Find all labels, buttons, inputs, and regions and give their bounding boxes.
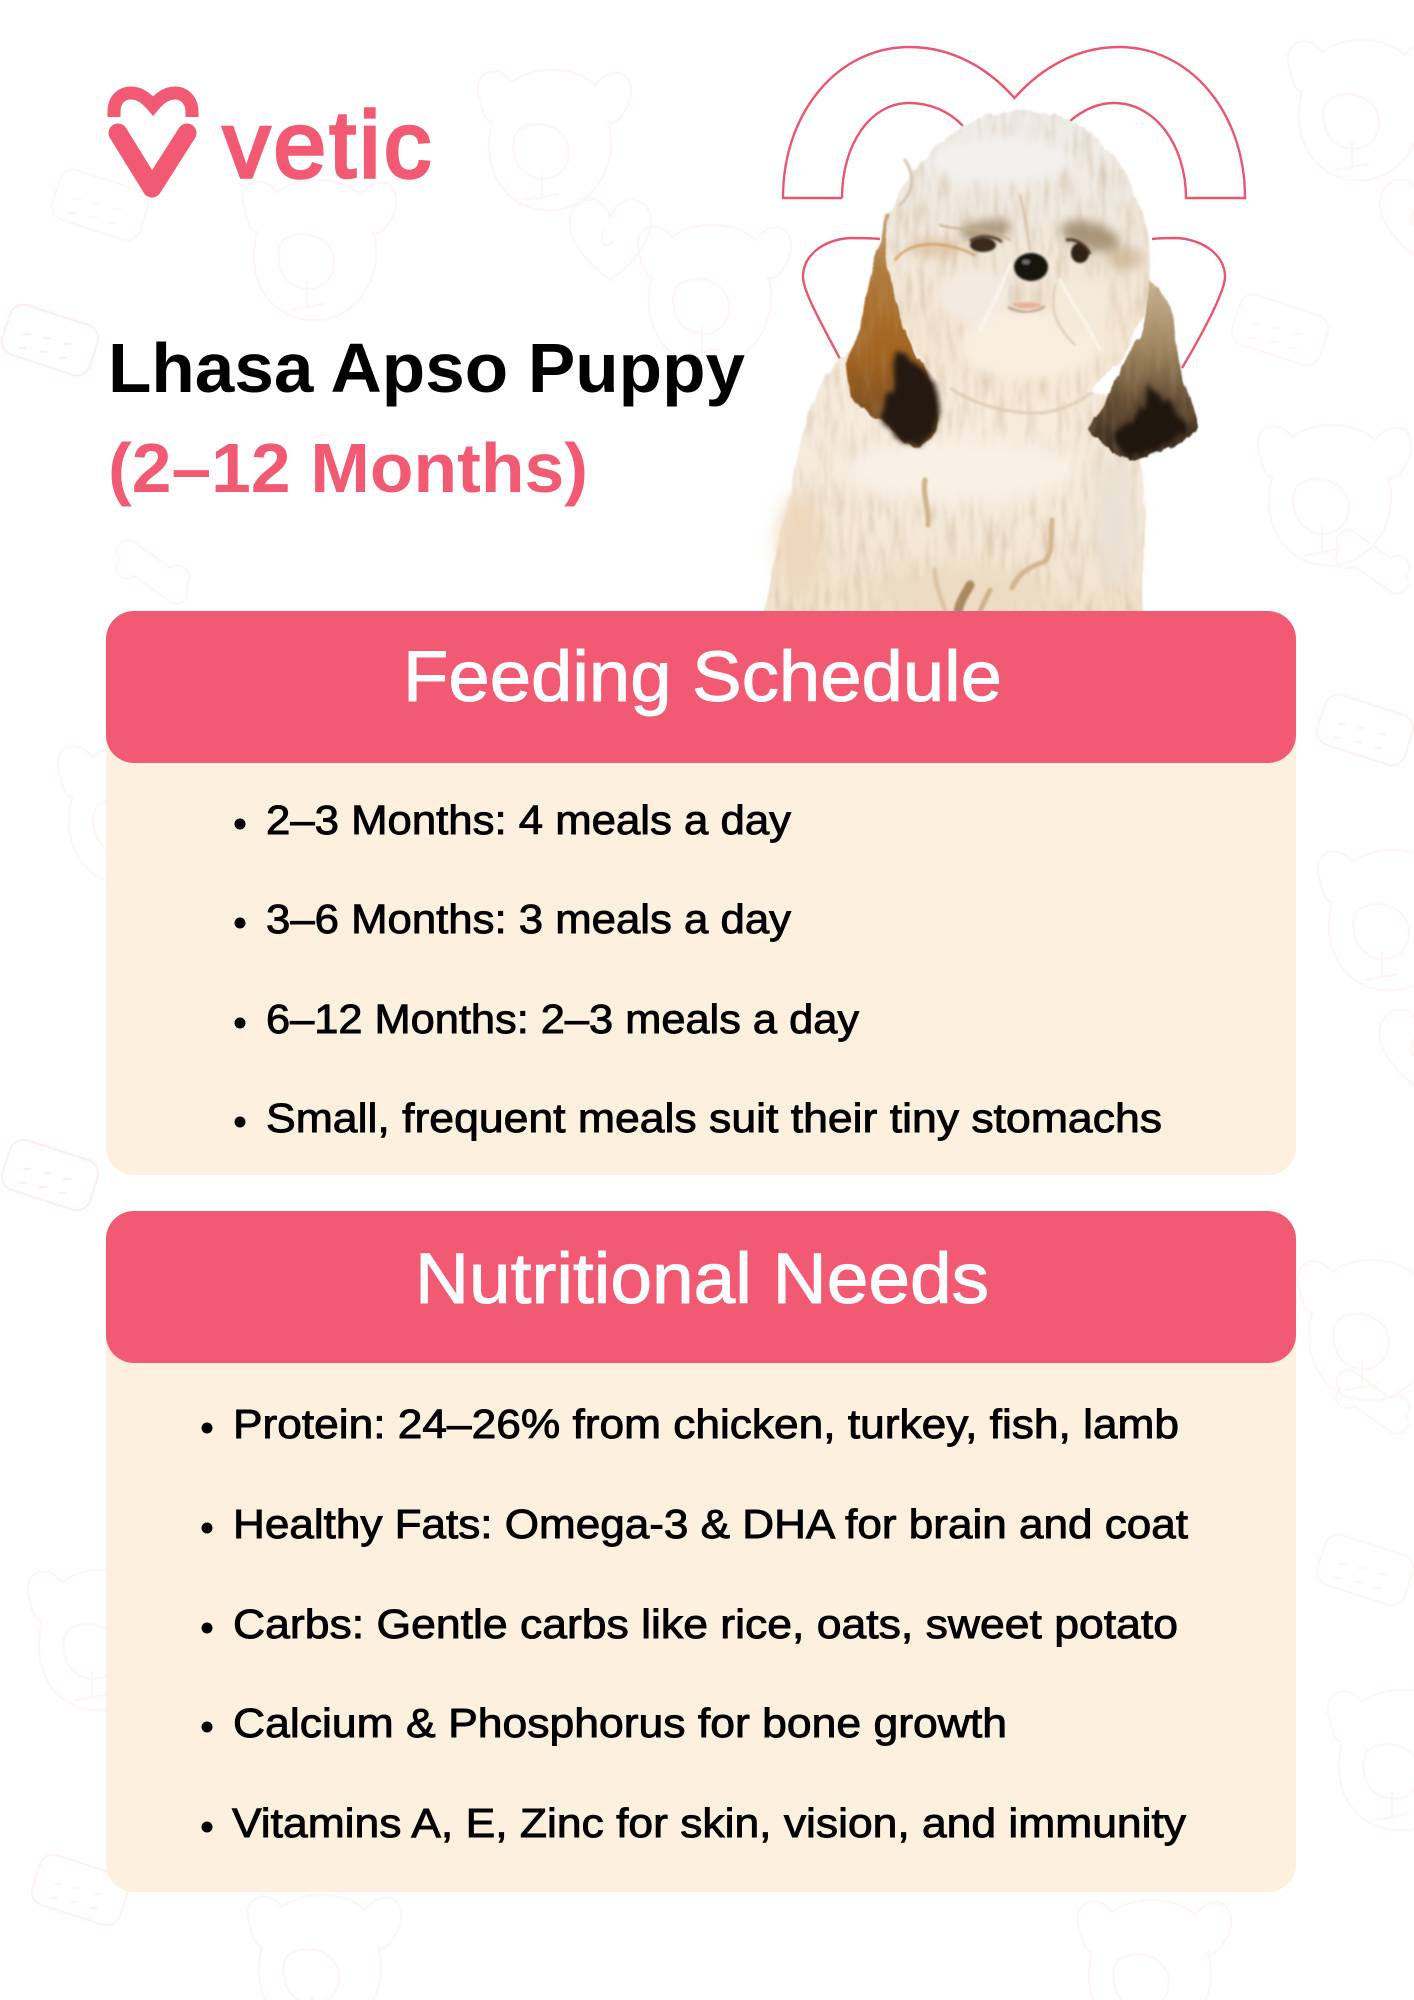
left eye [970, 237, 1002, 252]
panel header bar [106, 1211, 1296, 1363]
list item: Vitamins A, E, Zinc for skin, vision, and immunity [232, 1800, 1187, 1846]
list item: Healthy Fats: Omega-3 & DHA for brain and coat [233, 1501, 1189, 1547]
list item: Calcium & Phosphorus for bone growth [233, 1700, 1007, 1746]
body shading [778, 436, 1135, 616]
title line: breed name: Lhasa Apso Puppy [108, 329, 745, 407]
dog body [762, 350, 1144, 620]
title line: age range: (2–12 Months) [108, 429, 588, 507]
icon: heart and V logo mark [114, 93, 192, 188]
list item: 2–3 Months: 4 meals a day [266, 797, 792, 843]
right ear [1089, 275, 1197, 460]
list item: 3–6 Months: 3 meals a day [266, 896, 792, 942]
list item: Carbs: Gentle carbs like rice, oats, sweet potato [233, 1601, 1178, 1647]
list item: 6–12 Months: 2–3 meals a day [266, 996, 860, 1042]
face fur strands [895, 160, 1100, 350]
list item: Protein: 24–26% from chicken, turkey, fish, lamb [233, 1401, 1179, 1447]
logo wordmark: vetic [223, 92, 431, 197]
list item: Small, frequent meals suit their tiny stomachs [266, 1095, 1162, 1141]
panel body [106, 1300, 1296, 1892]
nutrition list [202, 1401, 1189, 1846]
ruff line under chin [950, 388, 1092, 413]
facial shading [907, 136, 1145, 379]
logo: vetic [114, 92, 431, 197]
feeding list [234, 797, 1162, 1141]
title [108, 329, 745, 507]
panel: nutritional needs [106, 1211, 1296, 1892]
dog photo illustration [762, 111, 1197, 620]
right eye [1066, 240, 1090, 263]
panel heading: Nutritional Needs [415, 1240, 989, 1319]
panel: feeding schedule [106, 611, 1296, 1175]
panel header bar [106, 611, 1296, 763]
head [886, 111, 1150, 407]
mouth [1008, 286, 1045, 312]
left ear dark tip [878, 350, 937, 445]
body fur tufts [924, 480, 1052, 612]
panel heading: Feeding Schedule [403, 638, 1002, 717]
nose [1014, 253, 1048, 281]
left ear [845, 212, 938, 448]
heart outline behind dog [783, 47, 1245, 368]
panel body [106, 700, 1296, 1175]
right ear dark tip [1114, 385, 1186, 456]
